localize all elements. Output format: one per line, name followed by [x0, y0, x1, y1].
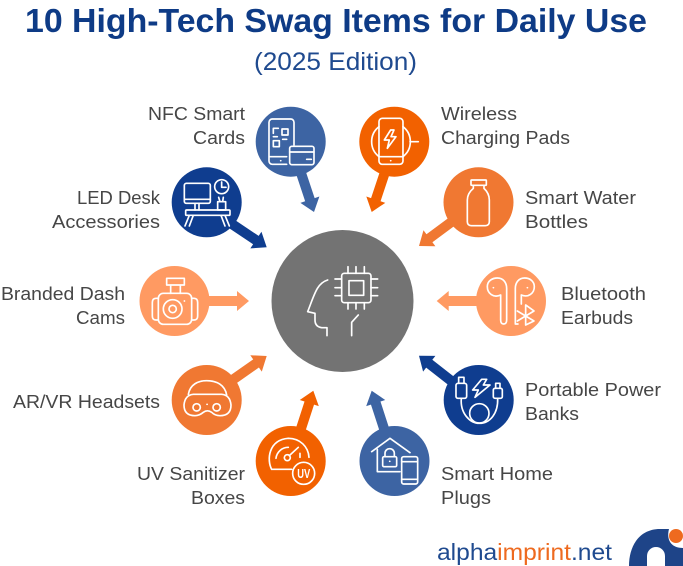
- label: UV Sanitizer: [137, 463, 245, 484]
- label: [561, 283, 646, 328]
- arrow: NFC Smart Cards: [292, 171, 323, 215]
- arrow: Portable Power Banks: [413, 348, 458, 389]
- icon: smart home: [360, 426, 430, 496]
- label: Smart Home: [441, 463, 553, 484]
- arrow: AR/VR Headsets: [227, 348, 272, 388]
- item: Bluetooth Earbuds: [437, 266, 646, 336]
- icon: UV gauge: [256, 426, 326, 496]
- label: [441, 463, 553, 508]
- label: Plugs: [441, 487, 491, 508]
- subtitle: (2025 Edition): [254, 48, 417, 76]
- item: Smart Home Plugs: [360, 388, 553, 508]
- central circle with AI head icon: [272, 230, 414, 372]
- label: [525, 379, 661, 424]
- label: [441, 103, 570, 148]
- label: Boxes: [191, 487, 245, 508]
- icon: headset: [172, 365, 242, 435]
- item: NFC Smart Cards: [148, 103, 326, 215]
- icon: cables and bolt: [444, 365, 514, 435]
- item: Smart Water Bottles: [413, 167, 636, 254]
- label: [525, 187, 636, 232]
- icon: charging phone: [359, 107, 429, 177]
- icon: UV gauge: UV: [297, 467, 311, 481]
- icon: dash cam: [140, 266, 210, 336]
- label: Smart Water: [525, 187, 636, 208]
- label: Wireless: [441, 103, 517, 124]
- arrow: Smart Home Plugs: [362, 388, 394, 432]
- label: Portable Power: [525, 379, 661, 400]
- label: Banks: [525, 403, 579, 424]
- icon: desk setup: [172, 167, 242, 237]
- item: UV Sanitizer Boxes: [137, 388, 326, 508]
- logo: [629, 529, 683, 566]
- item: Wireless Charging Pads: [359, 103, 570, 215]
- label: Charging Pads: [441, 127, 570, 148]
- label: Accessories: [52, 211, 160, 232]
- brand name: alphaimprint.net: [437, 539, 613, 565]
- label: LED Desk: [77, 187, 161, 208]
- label: NFC Smart: [148, 103, 245, 124]
- icon: bottle: [444, 167, 514, 237]
- title: 10 High-Tech Swag Items for Daily Use: [25, 2, 647, 39]
- item: LED Desk Accessories: [52, 167, 272, 256]
- item: AR/VR Headsets: [13, 348, 272, 435]
- arrow: Bluetooth Earbuds: [437, 291, 482, 311]
- label: [137, 463, 245, 508]
- arrow: Branded Dash Cams: [204, 291, 249, 311]
- arrow: LED Desk Accessories: [226, 216, 272, 256]
- item: Portable Power Banks: [413, 348, 661, 435]
- icon: phone and card: [256, 107, 326, 177]
- label: [148, 103, 245, 148]
- arrow: Smart Water Bottles: [413, 213, 459, 254]
- label: Cards: [193, 127, 245, 148]
- label: [52, 187, 161, 232]
- item: Branded Dash Cams: [1, 266, 249, 336]
- label: AR/VR Headsets: [13, 391, 160, 412]
- arrow: UV Sanitizer Boxes: [291, 388, 323, 432]
- label: Branded Dash: [1, 283, 125, 304]
- icon: earbuds: [476, 266, 546, 336]
- label: Earbuds: [561, 307, 633, 328]
- label: Cams: [76, 307, 125, 328]
- label: Bluetooth: [561, 283, 646, 304]
- label: Bottles: [525, 211, 588, 232]
- arrow: Wireless Charging Pads: [362, 171, 394, 215]
- label: [1, 283, 125, 328]
